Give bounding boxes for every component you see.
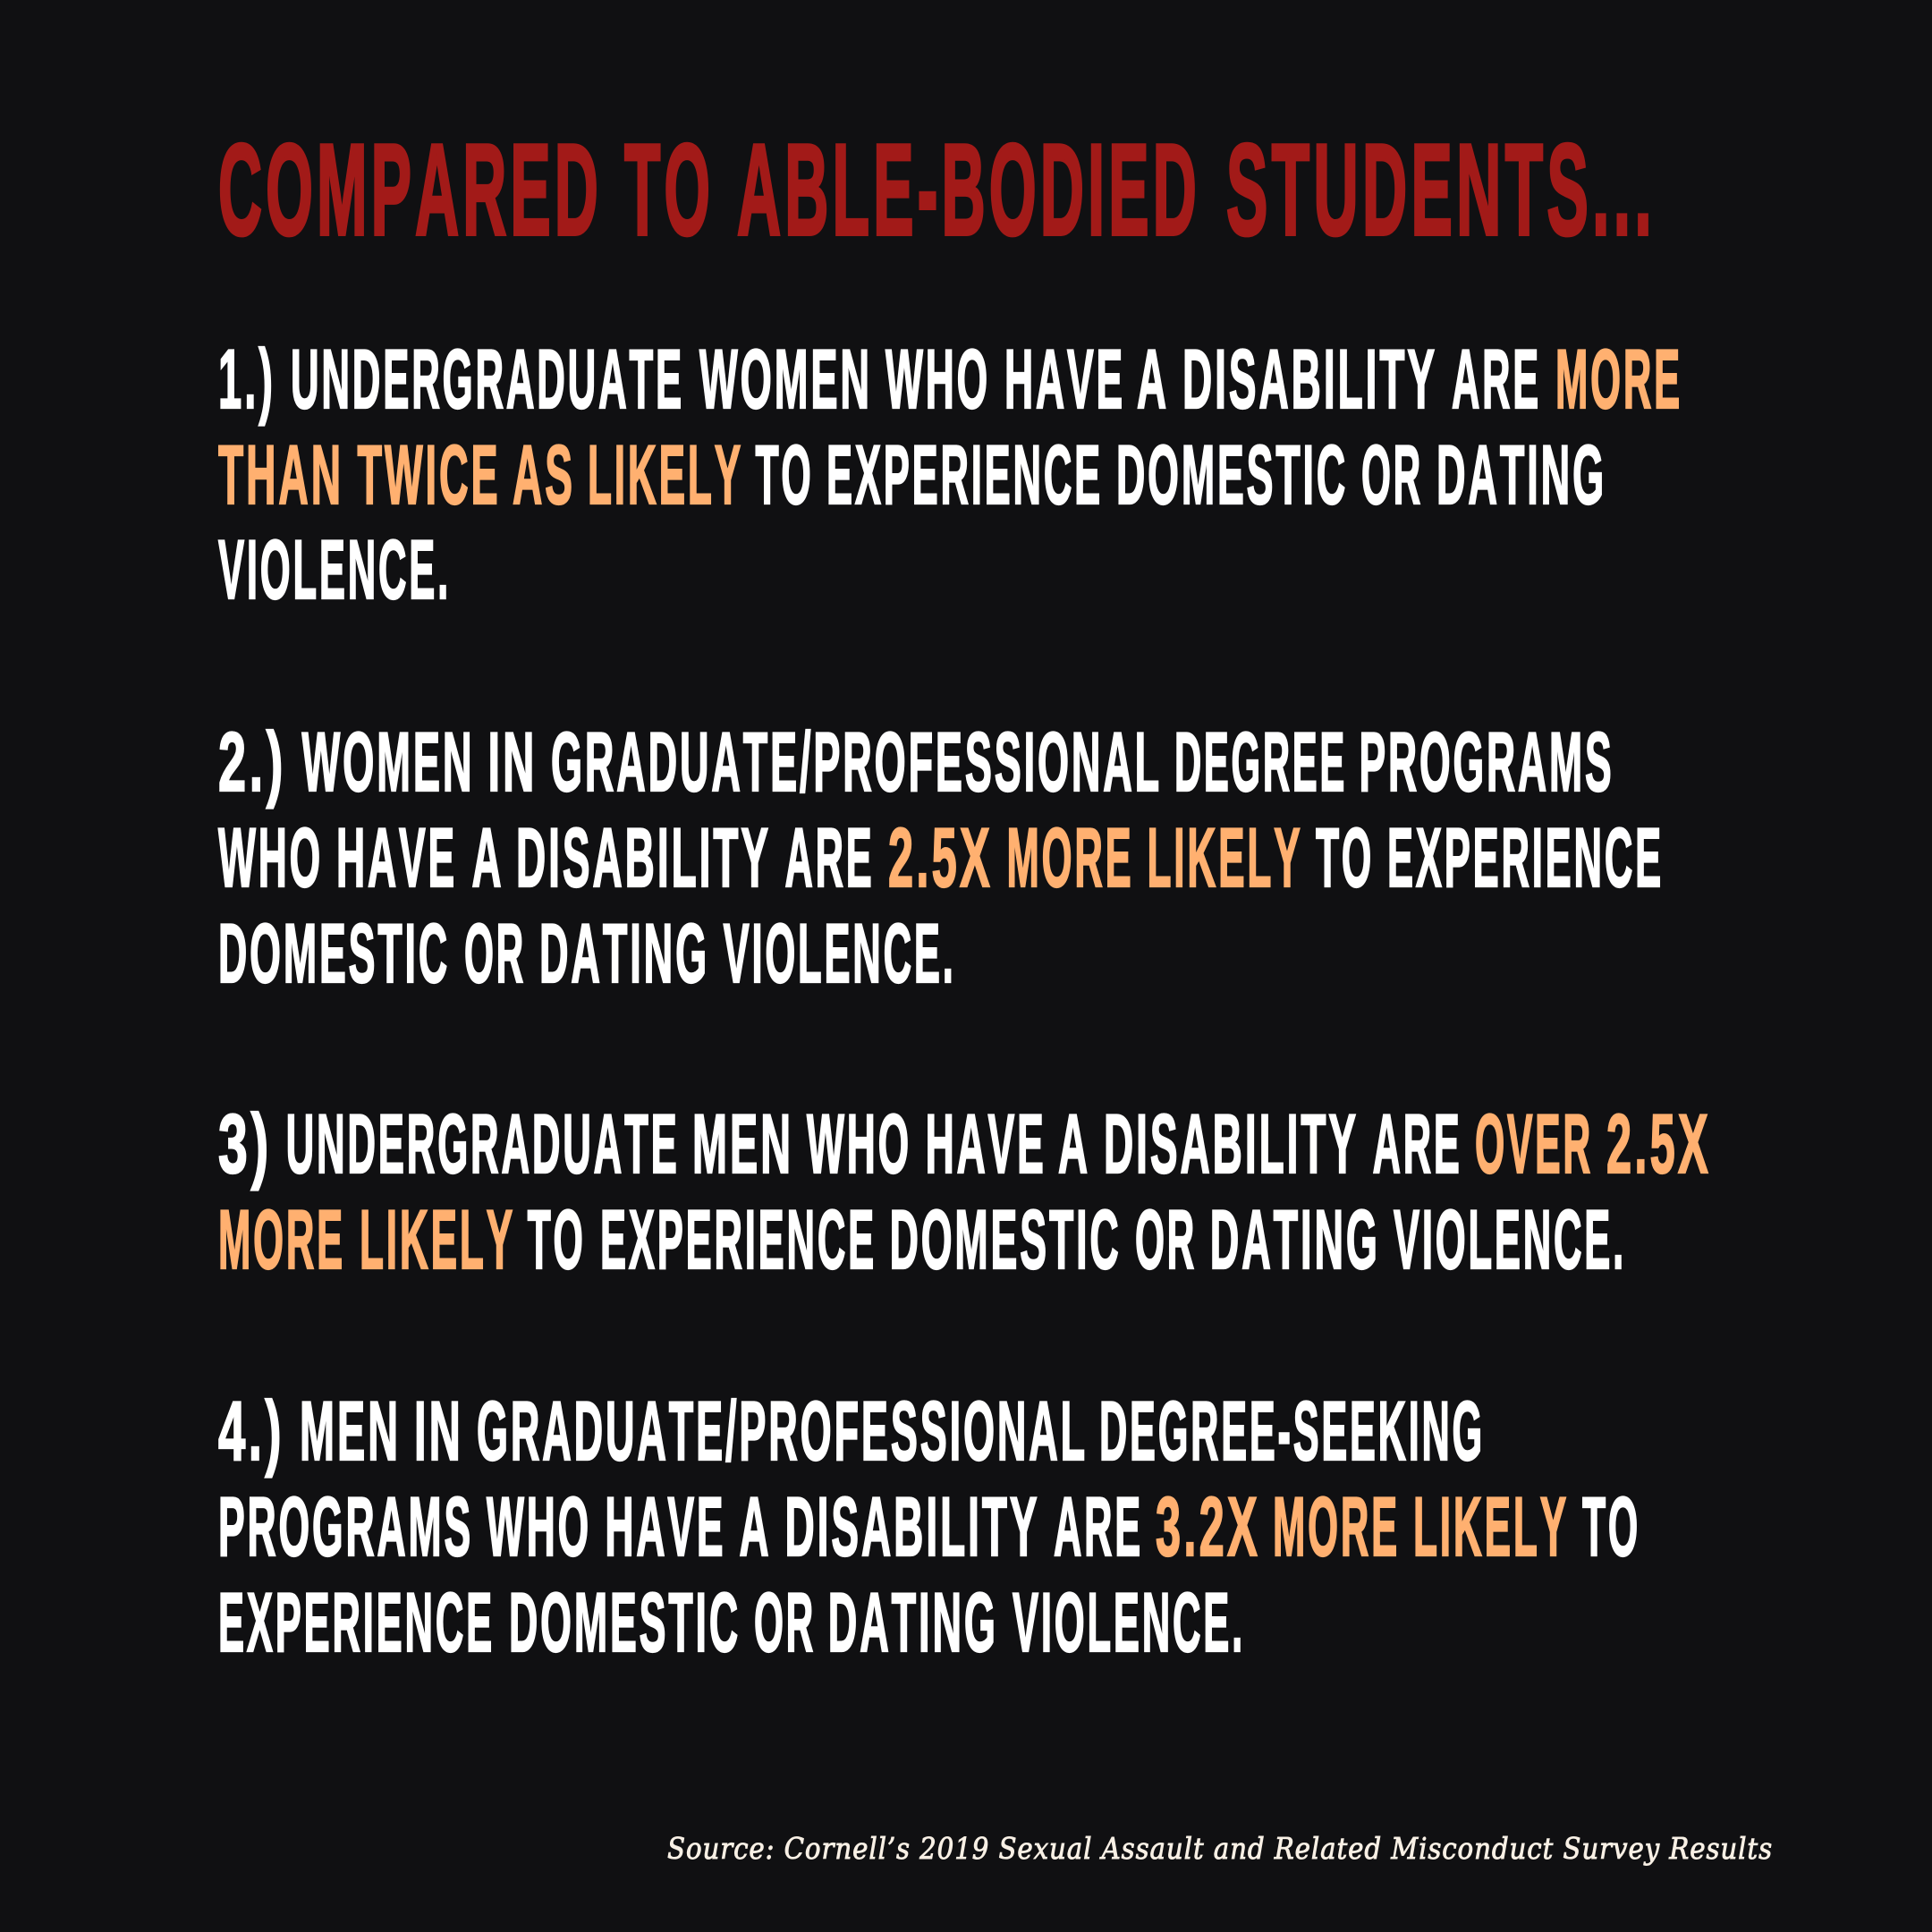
statistic 2: graduate women: DOMESTIC [218,906,450,1000]
title: COMPARED [218,117,602,262]
statistic 2: graduate women: A [472,810,504,904]
statistic 1: undergraduate women: HAVE [1004,332,1125,426]
statistic 2: graduate women: WOMEN [302,715,474,809]
statistic 3: undergraduate men: VIOLENCE. [1394,1192,1626,1286]
statistic 1: undergraduate women: WOMEN [699,332,872,426]
statistic 3: undergraduate men: OVER [1475,1097,1593,1191]
statistic 2: graduate women [218,715,1664,1000]
statistic 3: undergraduate men: TO [528,1192,586,1286]
statistic 3: undergraduate men: DATING [1210,1192,1380,1286]
title [218,117,1656,262]
statistic 4: graduate men: IN [414,1384,463,1478]
statistic 2: graduate women: HAVE [336,810,457,904]
statistic 1: undergraduate women: DOMESTIC [1116,428,1348,521]
statistic 1: undergraduate women [218,332,1682,616]
statistic 2: graduate women: DATING [539,906,709,1000]
statistic 2: graduate women: MORE [1007,810,1134,904]
statistic 2: graduate women: GRADUATE/PROFESSIONAL [551,715,1162,809]
statistic 1: undergraduate women: WHO [886,332,990,426]
statistic 2: graduate women: WHO [218,810,323,904]
statistic 2: graduate women: 2.) [218,715,286,809]
statistic 1: undergraduate women: OR [1361,428,1423,521]
statistic 2: graduate women: 2.5X [888,810,993,904]
statistic 1: undergraduate women: 1.) [218,332,275,426]
statistic 3: undergraduate men: HAVE [926,1097,1046,1191]
statistic 2: graduate women: VIOLENCE. [724,906,956,1000]
statistic 4: graduate men: WHO [487,1479,591,1573]
statistic 1: undergraduate women: UNDERGRADUATE [291,332,684,426]
statistic 4: graduate men: ARE [1054,1479,1143,1573]
statistic 4: graduate men: A [739,1479,771,1573]
statistic 3: undergraduate men: DOMESTIC [890,1192,1122,1286]
title: ABLE-BODIED [737,117,1200,262]
statistic 4: graduate men: LIKELY [1413,1479,1569,1573]
statistic 4: graduate men: DEGREE-SEEKING [1099,1384,1485,1478]
statistic 2: graduate women: ARE [785,810,875,904]
statistic 4: graduate men: PROGRAMS [218,1479,473,1573]
statistic 1: undergraduate women: DATING [1436,428,1606,521]
statistic 1: undergraduate women: DISABILITY [1182,332,1437,426]
statistic 1: undergraduate women: TWICE [358,428,501,521]
statistic 4: graduate men: MORE [1273,1479,1400,1573]
statistic 2: graduate women: IN [488,715,537,809]
statistic 3: undergraduate men: WHO [807,1097,911,1191]
statistic 4: graduate men: HAVE [605,1479,725,1573]
statistic 3: undergraduate men [218,1097,1711,1286]
statistic 4: graduate men [218,1384,1640,1669]
infographic canvas: MORE [1555,332,1682,426]
statistic 3: undergraduate men: EXPERIENCE [600,1192,877,1286]
statistic 2: graduate women: PROGRAMS [1360,715,1614,809]
statistic 4: graduate men: DISABILITY [785,1479,1039,1573]
statistic 4: graduate men: 3.2X [1156,1479,1260,1573]
statistic 3: undergraduate men: MORE [218,1192,345,1286]
statistic 1: undergraduate women: LIKELY [588,428,743,521]
statistic 1: undergraduate women: THAN [218,428,343,521]
statistic 1: undergraduate women: VIOLENCE. [218,522,451,616]
statistic 4: graduate men: OR [754,1575,816,1669]
statistic 4: graduate men: DATING [828,1575,998,1669]
statistic 3: undergraduate men: 3) [218,1097,272,1191]
statistic 3: undergraduate men: DISABILITY [1104,1097,1359,1191]
title: TO [624,117,714,262]
statistic 2: graduate women: DEGREE [1174,715,1347,809]
statistic 1: undergraduate women: ARE [1452,332,1541,426]
infographic canvas: TO [1582,1479,1640,1573]
statistic 1: undergraduate women: A [1137,332,1169,426]
statistic 3: undergraduate men: OR [1135,1192,1197,1286]
source citation: Source: Cornell’s 2019 Sexual Assault and Related Misconduct Survey Results [667,1831,1773,1866]
statistic 4: graduate men: GRADUATE/PROFESSIONAL [477,1384,1088,1478]
statistic 3: undergraduate men: MEN [692,1097,793,1191]
statistic 2: graduate women: TO [1316,810,1374,904]
statistic 2: graduate women: OR [464,906,526,1000]
statistic 3: undergraduate men: ARE [1373,1097,1462,1191]
statistic 4: graduate men: DOMESTIC [509,1575,741,1669]
statistic 4: graduate men: EXPERIENCE [218,1575,495,1669]
statistic 3: undergraduate men: 2.5X [1606,1097,1711,1191]
statistic 4: graduate men: MEN [300,1384,401,1478]
statistic 1: undergraduate women: TO [755,428,814,521]
statistic 3: undergraduate men: A [1058,1097,1090,1191]
statistic 2: graduate women: LIKELY [1147,810,1302,904]
statistic 4: graduate men: 4.) [218,1384,284,1478]
statistic 2: graduate women: DISABILITY [516,810,771,904]
statistic 4: graduate men: VIOLENCE. [1013,1575,1245,1669]
statistic 3: undergraduate men: UNDERGRADUATE [286,1097,680,1191]
statistic 1: undergraduate women: AS [513,428,575,521]
statistic 3: undergraduate men: LIKELY [360,1192,515,1286]
statistic 1: undergraduate women: EXPERIENCE [826,428,1103,521]
